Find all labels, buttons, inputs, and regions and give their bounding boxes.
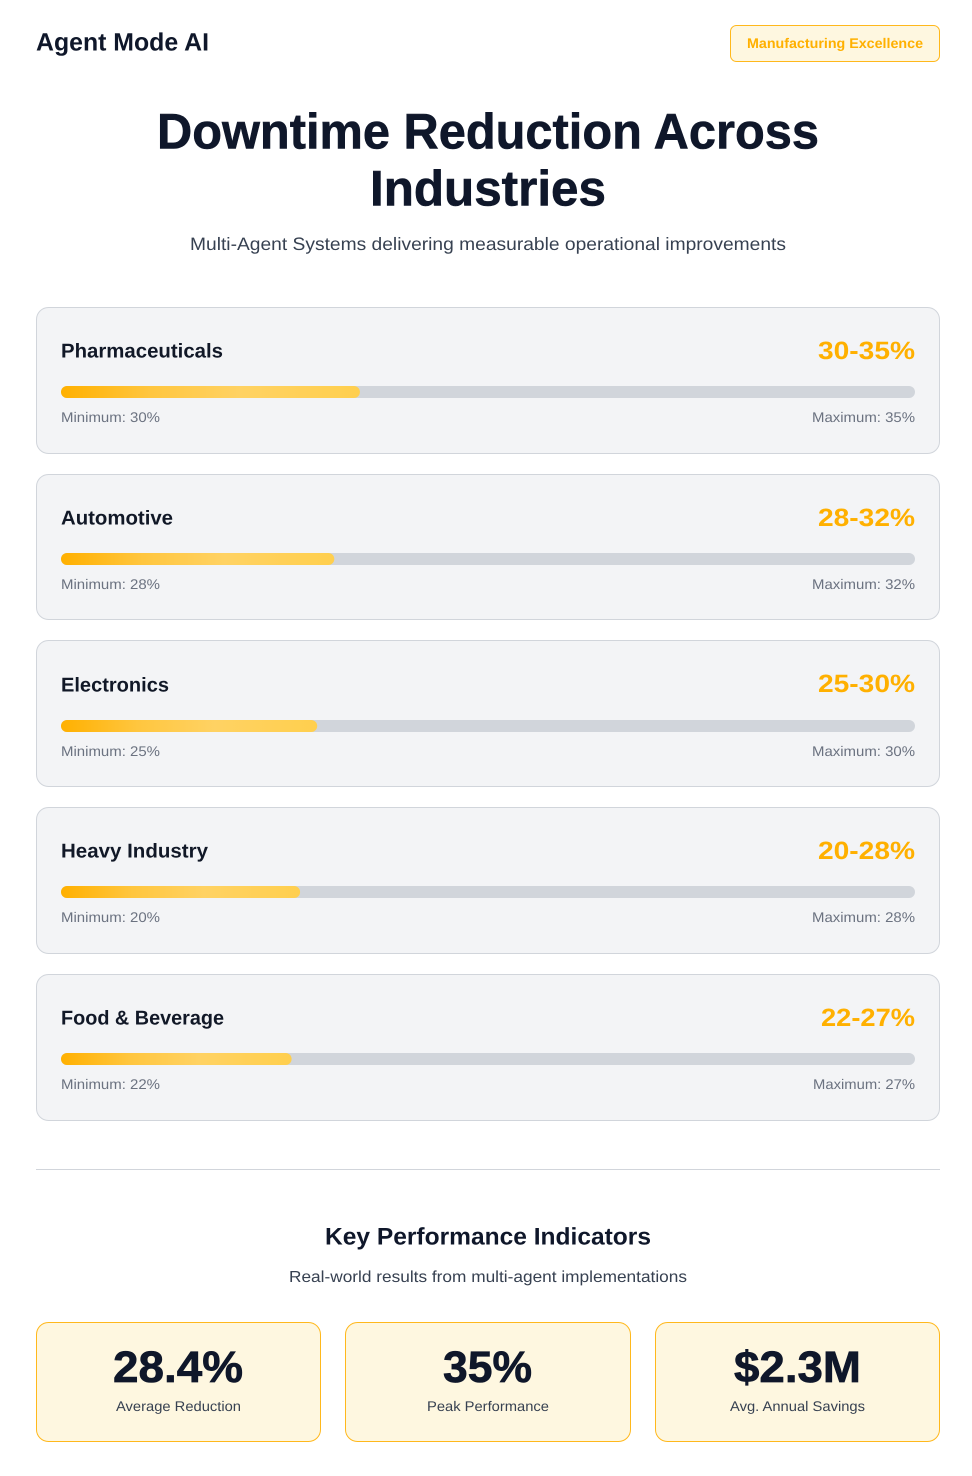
KPI card: Average Reduction: Average Reduction [116, 1398, 241, 1414]
panel: Heavy Industry: Minimum: 20% [61, 909, 160, 925]
title: Downtime Reduction Across [157, 104, 819, 160]
KPI card: Peak Performance: Peak Performance [427, 1398, 549, 1414]
progress bar: 32% [61, 553, 915, 565]
panel: Electronics: Electronics [61, 674, 169, 696]
KPI card: Avg. Annual Savings: Avg. Annual Savings [730, 1398, 865, 1414]
panel: Food & Beverage: Food & Beverage [61, 1008, 224, 1030]
heading: Key Performance Indicators: Key Performance Indicators [325, 1224, 651, 1250]
badge: Manufacturing Excellence [730, 26, 940, 62]
title: Industries [370, 160, 606, 216]
panel: Heavy Industry: 20-28% [818, 837, 915, 865]
badge: Manufacturing Excellence: Manufacturing Excellence [747, 35, 923, 51]
panel: Electronics: Minimum: 25% [61, 743, 160, 759]
panel: Electronics [36, 640, 940, 786]
panel: Electronics: Maximum: 30% [812, 743, 915, 759]
panel: Automotive: Maximum: 32% [812, 576, 915, 592]
panel: Food & Beverage: Maximum: 27% [813, 1076, 915, 1092]
panel: Heavy Industry: Heavy Industry [61, 840, 209, 862]
KPI card: Peak Performance: 35% [443, 1343, 532, 1392]
panel: Pharmaceuticals: Pharmaceuticals [61, 340, 223, 362]
panel: Heavy Industry: Maximum: 28% [812, 909, 915, 925]
panel: Pharmaceuticals: 30-35% [818, 337, 915, 365]
panel: Heavy Industry [36, 808, 940, 954]
KPI card: Average Reduction: 28.4% [113, 1343, 243, 1392]
progress bar: 27% [61, 1053, 915, 1065]
panel: Food & Beverage: 22-27% [821, 1004, 915, 1032]
KPI subheading: Real-world results from multi-agent implementations [289, 1269, 687, 1286]
panel: Food & Beverage [36, 974, 940, 1120]
panel: Food & Beverage: Minimum: 22% [61, 1076, 160, 1092]
panel: Electronics: 25-30% [818, 670, 915, 698]
KPI card: Avg. Annual Savings [656, 1322, 940, 1442]
panel: Automotive: Automotive [61, 508, 173, 530]
KPI card: Average Reduction [36, 1322, 320, 1442]
progress bar: 35% [61, 386, 915, 398]
progress bar: 28% [61, 886, 915, 898]
panel: Pharmaceuticals: Minimum: 30% [61, 409, 160, 425]
panel: Automotive: Minimum: 28% [61, 576, 160, 592]
subtitle: Multi-Agent Systems delivering measurable operational improvements [190, 234, 786, 254]
logo: Agent Mode AI: Agent Mode AI [36, 28, 209, 56]
progress bar: 30% [61, 720, 915, 732]
panel: Pharmaceuticals [36, 308, 940, 454]
KPI card: Peak Performance [346, 1322, 630, 1442]
panel: Automotive [36, 474, 940, 620]
title [157, 104, 819, 216]
KPI card: Avg. Annual Savings: $2.3M [734, 1343, 861, 1392]
panel: Automotive: 28-32% [818, 504, 915, 532]
panel: Pharmaceuticals: Maximum: 35% [812, 409, 915, 425]
